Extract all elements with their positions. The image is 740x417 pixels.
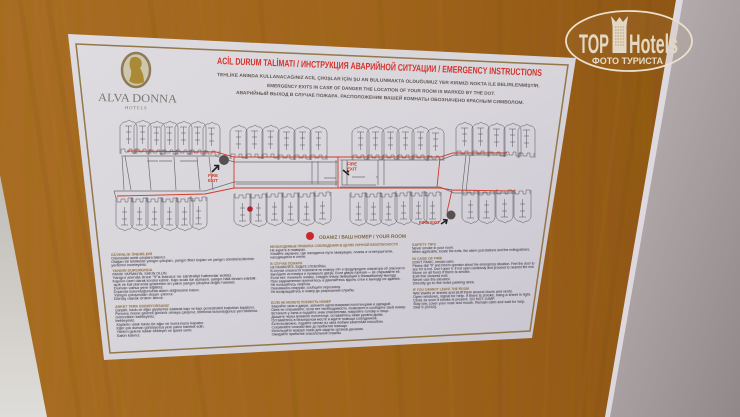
column 3: English instructions: Open windows, signal for help. If there is smoke, hang a sheet in light. <box>413 293 531 299</box>
column 1: Turkish instructions: Kapının üzeri olarak kontrol ediniz. Kapı sıcak ise açmayın, yangın hâlâ devam edebilir. <box>113 276 257 283</box>
column 2: Russian instructions: Сохраняйте спокойствие до прибытия помощи. <box>272 324 348 329</box>
brand name: ALVA DONNA <box>98 92 178 106</box>
column 2: Russian instructions: В СЛУЧАЕ ПОЖАРА <box>270 261 303 266</box>
column 1: Turkish instructions: Dönüş olarak önlem alınız. <box>114 296 164 301</box>
Hotels text: Hotels <box>629 29 678 59</box>
label: FIRE EXIT <box>419 220 440 225</box>
hotel logo <box>98 53 178 110</box>
column 3: English instructions: see if it is hot. Don't open it. If not open cautiously and proceed to nearest fire exit. <box>412 265 535 271</box>
brand sub-name: HOTELS <box>125 105 148 110</box>
top middle wing rooms <box>230 125 327 160</box>
intro text <box>217 70 540 105</box>
column 3: English instructions: IN CASE OF FIRE <box>412 256 443 261</box>
column 1: Turkish instructions: PANİK YAPMAYIN, SAKİN OLUN. <box>112 270 167 276</box>
column 3: English instructions: Never smoke in your room. <box>412 246 454 250</box>
column 3: English instructions: IF YOU CANNOT LEAVE THE ROOM <box>413 287 469 292</box>
column 1: Turkish instructions: açık ve kat planında gösterilen en yakın yangın çıkışına doğru hareket. <box>114 280 236 287</box>
column 2: Russian instructions: В случае опасности позвоните по номеру «9» и предупредите оператора об опасности. <box>270 266 406 273</box>
paper sign <box>68 34 576 360</box>
fire exit marker 3 <box>419 210 456 225</box>
column 1: Turkish instructions <box>111 249 259 338</box>
label: FIRE <box>208 173 218 178</box>
fire exit marker 1 <box>208 155 229 183</box>
column 1: Turkish instructions: bekleyiniz. <box>115 319 135 323</box>
red evacuation routes <box>117 151 515 215</box>
label: FIRE <box>347 162 357 166</box>
column 2: Russian instructions: Окна не открывайте, если нет необходимости, позвоните и сообщите свой номер. <box>271 305 406 312</box>
bottom middle wing rooms <box>234 191 331 227</box>
column 2: Russian instructions: Если возможно, подайте сигнал из окна любым заметным способом. <box>272 320 384 326</box>
bottom centre wing rooms <box>350 191 441 226</box>
floor plan <box>114 120 535 231</box>
bottom left wing rooms <box>116 196 207 231</box>
column 2: Russian instructions: Встаньте у окна и подайте знак спасателям, накройте голову и лицо. <box>271 309 389 315</box>
column 1: Turkish instructions: Odanızdaki acele çıkışlara bakınız. <box>111 255 166 260</box>
exit symbol <box>446 210 456 220</box>
exit symbol <box>219 155 229 165</box>
photo caption: ФОТО ТУРИСТА <box>592 56 663 66</box>
watermark: TopHotels <box>566 11 692 71</box>
arrow <box>343 170 349 175</box>
column 2: Russian instructions: Если нет, покиньте номер, следуя плану эвакуации к ближайшему выходу. <box>271 273 397 280</box>
column 1: Turkish instructions: Yangın anında önce "9"a basınız ve santraliyi haberdar ediniz. <box>112 273 233 280</box>
column 1: Turkish instructions: Yangın çıkışından dışarı çıkınız. <box>114 292 174 297</box>
Russian intro: АВАРИЙНЫЙ ВЫХОД В СЛУЧАЕ ПОЖАРА. РАСПОЛОЖЕНИЕ ВАШЕЙ КОМНАТЫ ОБОЗНАЧЕНО КРАСНЫМ СИМВОЛОМ. <box>236 88 524 105</box>
logo medallion <box>122 53 150 87</box>
title: ACİL DURUM TALİMATI / ИНСТРУКЦИЯ АВАРИЙНОЙ СИТУАЦИИ / EMERGENCY INSTRUCTIONS <box>217 55 542 79</box>
column 2: Russian instructions: НЕ ПАНИКУЙТЕ, БУДЬТЕ СПОКОЙНЫ. <box>270 264 326 269</box>
bottom right wing rooms <box>462 189 531 224</box>
column 1: Turkish instructions: YANGIN DURUMUNDA <box>112 268 153 273</box>
column 3: English instructions: DON'T PANIC, remain calm. <box>412 260 454 264</box>
column 2: Russian instructions: Не возвращайтесь в номер до разрешения службы. <box>271 288 355 294</box>
oval outline <box>566 11 692 71</box>
column 3: English instructions: Dial 9 (0242). <box>413 305 437 309</box>
column 1: Turkish instructions: ANKET TERK EDEMİYORSANIZ <box>115 304 169 309</box>
column 1: Turkish instructions: Yardım gelene kadar bekleyin ve işaret verin. <box>117 328 193 334</box>
column 3: English instructions: Never use the elevator. <box>413 277 451 282</box>
column 1: Turkish instructions: Sakin kalınız. <box>117 333 141 338</box>
arrow <box>212 166 218 172</box>
column 3: English instructions: Wet towels or sheets and stuff them around doors and vents. <box>413 289 513 295</box>
column 1: Turkish instructions: Pencere önüne gelerek görünür olmaya çalışınız, telefonla bulunduğunuz yeri bildiriniz. <box>115 309 258 316</box>
column 3: English instructions: SAFETY TIPS <box>412 242 437 247</box>
column 1: Turkish instructions: Duman varsa yere eğiliniz. <box>114 285 164 290</box>
column 2: Russian instructions: Выходите из номера и проверьте дверь. Если дверь горячая — не открывайте её. <box>270 270 401 276</box>
column 2: Russian instructions: НЕОБХОДИМЫЕ ПРАВИЛА СОБЛЮДЕНИЯ В ЦЕЛЯХ ЛИЧНОЙ БЕЗОПАСНОСТИ <box>270 242 398 249</box>
your room dot <box>247 206 253 212</box>
fire exit marker 2 <box>343 162 357 175</box>
label: EXIT <box>347 166 357 172</box>
legend: your room <box>306 232 406 241</box>
column 3: English instructions <box>412 240 535 309</box>
column 2: Russian instructions: Оказавшись снаружи, сообщите персоналу. <box>271 285 341 290</box>
column 2: Russian instructions: Узнайте заранее, где находятся пути эвакуации, планы и огнетушители, <box>270 249 393 256</box>
column 1: Turkish instructions: Görevlileri bekleyiniz. <box>115 315 155 319</box>
tower icon <box>611 16 628 53</box>
top right wing rooms <box>456 122 535 158</box>
arrow <box>441 220 447 224</box>
column 1: Turkish instructions: GÜVENLİK ÖNERİLERİ <box>111 251 152 257</box>
top left wing rooms <box>120 120 220 156</box>
column 2: Russian instructions: Не пользуйтесь лифтом. <box>271 282 311 287</box>
column 2: Russian instructions: Дышите через влажное полотенце, оставайтесь ниже уровня дыма. <box>271 313 383 319</box>
column 1: Turkish instructions: Kişilerin ıslak havlu ile ağız ve burnunuzu kapatın. <box>116 321 205 327</box>
Turkish intro: TEHLİKE ANINDA KULLANACAĞINIZ ACİL ÇIKIŞLAR İÇİN ŞU AN BULUNMAKTA OLDUĞUMUZ YER KIRMIZI NOKTA İLE BELİRLENMİŞTİR. <box>217 70 540 88</box>
column 1: Turkish instructions: yerlerini inceleyiniz. <box>111 263 147 267</box>
right wall and door edge <box>605 0 740 417</box>
grey corridor walls <box>114 155 516 198</box>
column 3: English instructions: When applicable, locate the exits, fire alarm pull stations and the extinguishers. <box>412 248 530 254</box>
column 1: Turkish instructions: Çarşaflı, havlu ve diğer giysileriniz ıslatarak kapı ve kapı çevresindeki boşlukları kapatınız. <box>115 305 255 312</box>
column 3: English instructions: Move on all fours if there is smoke. <box>413 270 471 275</box>
TOP text: TOP <box>579 29 609 59</box>
column 3: English instructions: Exit the closest exit. <box>413 274 449 278</box>
column 2: Russian instructions: Оставайтесь в безопасном месте и ждите помощи сотрудников. <box>271 316 378 322</box>
column 3: English instructions: Stay low, cover your nose and mouth. Remain calm and wait for help. <box>413 300 525 306</box>
column 3: English instructions: Directly go to the hotel parking area. <box>413 280 475 285</box>
left wall <box>0 175 47 417</box>
column 2: Russian instructions: ЕСЛИ НЕ МОЖЕТЕ ПОКИНУТЬ НОМЕР <box>271 300 332 305</box>
column 2: Russian instructions: Используйте мокрую ткань для защиты органов дыхания. <box>272 327 364 333</box>
gold border <box>76 44 568 353</box>
column 2: Russian instructions: находящиеся в отеле. <box>270 255 306 259</box>
column 2: Russian instructions: Не курить в номерах. <box>270 248 306 252</box>
column 1: Turkish instructions: Eğer çok duman görülüyorsa yere yakın hareket edin. <box>116 325 205 330</box>
column 1: Turkish instructions: Dışarıda bulunduğunuzda alarm düğmesine basın. <box>114 288 200 294</box>
English intro: EMERGENCY EXITS IN CASE OF DANGER THE LOCATION OF YOUR ROOM IS MARKED BY THE DOT. <box>267 83 495 96</box>
column 2: Russian instructions: Ожидайте прибытия спасательной службы. <box>272 331 342 336</box>
column 2: Russian instructions: Закройте окна и двери, заткните щели мокрыми полотенцами и одеждой. <box>271 302 391 308</box>
column 2: Russian instructions: При задымлении пригнитесь и двигайтесь вдоль стен к выходу из здания. <box>271 277 401 283</box>
column 1: Turkish instructions: Olağan bir tehlikede yangın çıkışları, yangın fiber tuşları ve yangın söndürücülerinin <box>111 257 254 264</box>
legend: your room: ODANIZ / ВАШ НОМЕР / YOUR ROOM <box>319 234 406 241</box>
column 3: English instructions: Close as soon if smoke is present. DO NOT JUMP. <box>413 297 495 302</box>
top centre wing rooms <box>352 126 444 161</box>
label: EXIT <box>208 178 218 183</box>
column 2: Russian instructions <box>270 242 407 336</box>
column 3: English instructions: Please dial "9" and inform operator about the emergency situation. Feel the door to <box>412 261 535 268</box>
